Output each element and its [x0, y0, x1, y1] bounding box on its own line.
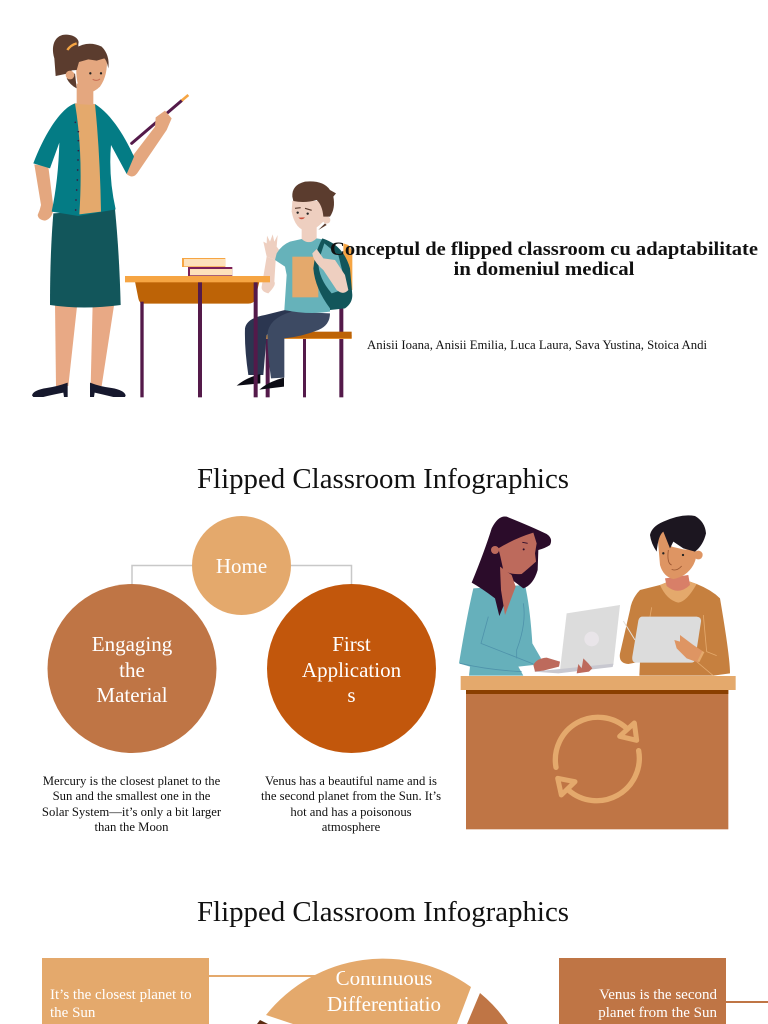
circle: Home: Home	[216, 554, 267, 578]
callout: left box: the Sun	[50, 1005, 96, 1021]
text block: Venus: hot and has a poisonous	[290, 805, 412, 819]
callout: left box	[42, 958, 315, 1024]
icon: woman	[459, 516, 592, 676]
heading: section 1: Flipped Classroom Infographics	[197, 463, 569, 495]
illustration: teacher and student at desk	[32, 35, 352, 397]
heading: section 2: Flipped Classroom Infographics	[197, 896, 569, 928]
illustration: two people at a desk	[459, 515, 736, 829]
text block: Venus: the second planet from the Sun. It’s	[261, 789, 441, 803]
pie chart: left segment	[257, 1020, 268, 1024]
pie chart: continuous differentiation segment: Continuous	[336, 966, 432, 990]
title: Conceptul de flipped classroom cu adaptabilitate	[330, 240, 758, 260]
text block: Venus: Venus has a beautiful name and is	[265, 774, 437, 788]
callout: left box: It’s the closest planet to	[50, 987, 192, 1003]
icon: teacher	[32, 35, 188, 397]
icon: desk	[125, 276, 270, 397]
circle: Engaging the Material	[48, 584, 216, 753]
callout: right box: Venus is the second	[599, 987, 717, 1003]
text block: Mercury: Solar System—it’s only a bit larger	[42, 805, 222, 819]
authors: Anisii Ioana, Anisii Emilia, Luca Laura, Sava Yustina, Stoica Andi	[367, 338, 708, 352]
callout: right box: planet from the Sun	[598, 1005, 717, 1021]
circle: Home	[192, 516, 291, 615]
callout: right box	[559, 958, 768, 1024]
circle: Engaging the Material: Material	[96, 683, 168, 707]
circle: First Applications: Application	[302, 658, 402, 682]
text block: Mercury: than the Moon	[94, 820, 169, 834]
circle: First Applications: First	[332, 632, 371, 656]
pie chart: continuous differentiation segment	[266, 959, 471, 1024]
icon: man with tablet	[620, 515, 730, 676]
circle: First Applications: s	[347, 683, 356, 707]
icon: laptop	[533, 605, 620, 673]
title: in domeniul medical	[454, 260, 634, 280]
pie chart: continuous differentiation segment: Differentiatio	[327, 992, 441, 1016]
circle: Engaging the Material: Engaging	[92, 632, 173, 656]
text block: Mercury: Sun and the smallest one in the	[53, 789, 211, 803]
circle: First Applications	[267, 584, 436, 753]
text block: Mercury: Mercury is the closest planet to the	[43, 774, 221, 788]
connector lines	[132, 566, 352, 585]
text block: Venus: atmosphere	[322, 820, 381, 834]
pie chart: right segment	[467, 993, 508, 1024]
icon: desk with cycle arrows	[461, 676, 736, 829]
title	[330, 240, 758, 280]
circle: Engaging the Material: the	[119, 658, 145, 682]
icon: student on chair	[237, 181, 352, 397]
icon: books	[182, 258, 232, 276]
